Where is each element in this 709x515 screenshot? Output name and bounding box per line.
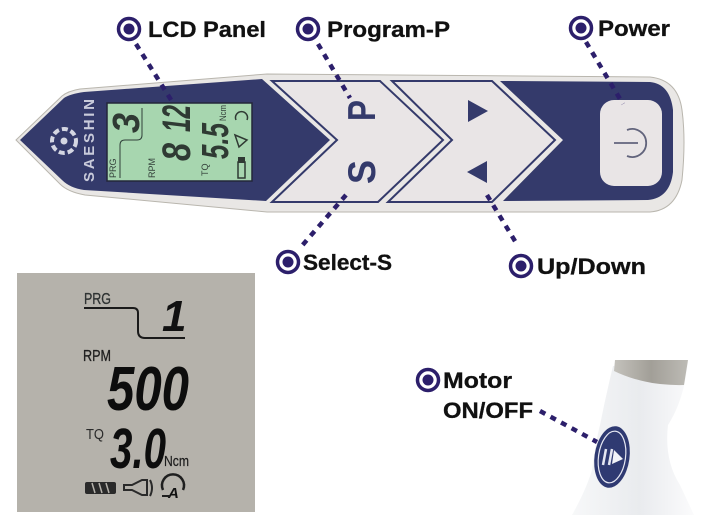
LCD screen	[106, 103, 252, 181]
label: LCD Panel: LCD Panel	[148, 17, 266, 42]
torque value: 5.5	[195, 122, 237, 159]
letter P: P	[341, 100, 384, 121]
label: Program-P: Program-P	[327, 17, 450, 42]
device body	[16, 74, 684, 212]
LCD screen: RPM	[147, 158, 157, 178]
program row	[84, 291, 186, 341]
torque row: TQ	[86, 426, 104, 443]
left navy section	[20, 79, 330, 201]
brand name: SAESHIN	[81, 99, 98, 182]
LCD screen: PRG	[108, 158, 118, 178]
leader: Select-S	[300, 195, 346, 248]
program number: 3	[106, 113, 148, 133]
icon: power	[614, 129, 646, 157]
status icons	[85, 474, 184, 502]
label: Power	[570, 16, 670, 41]
leader: Power	[586, 42, 623, 104]
label: Power: Power	[598, 16, 670, 41]
power button	[600, 100, 662, 186]
brand logo	[52, 99, 98, 182]
up/down chevron button	[388, 81, 555, 202]
torque row: Ncm	[164, 453, 189, 470]
status icons	[235, 112, 248, 178]
S and P chevron button	[272, 81, 443, 202]
rpm row	[83, 348, 189, 424]
LCD screen: TQ	[200, 164, 210, 176]
leader: LCD Panel	[136, 44, 173, 103]
handpiece illustration	[572, 360, 694, 515]
rpm value: 12	[155, 105, 199, 132]
handpiece collar	[614, 360, 688, 385]
leader: Up/Down	[487, 195, 518, 246]
motor button	[590, 424, 634, 490]
LCD screen: Ncm	[218, 105, 228, 121]
leader: Motor ON/OFF	[540, 411, 597, 442]
letter S: S	[341, 160, 384, 184]
icon: speaker	[124, 480, 152, 496]
icon: auto reverse: A	[167, 485, 179, 502]
label: Up/Down: Up/Down	[537, 254, 646, 279]
panel: control pad device	[16, 74, 684, 212]
icon: battery	[85, 482, 116, 494]
icon: play pause	[603, 449, 623, 465]
panel: enlarged LCD	[17, 273, 255, 512]
rpm row: 500	[107, 355, 189, 424]
torque row: 3.0	[110, 417, 166, 481]
leader: Program-P	[318, 44, 350, 98]
program row: 1	[162, 292, 186, 341]
icon: down triangle	[467, 161, 487, 183]
label: Motor ON/OFF	[418, 368, 533, 423]
program row: PRG	[84, 291, 111, 308]
right navy section	[500, 81, 673, 201]
icon: up triangle	[468, 100, 488, 122]
label: Motor ON/OFF: ON/OFF	[443, 398, 533, 423]
rpm value: 8	[155, 142, 199, 161]
label: Select-S: Select-S	[303, 250, 392, 275]
label: Motor ON/OFF: Motor	[443, 368, 512, 393]
rpm row: RPM	[83, 348, 111, 365]
rpm value	[155, 105, 199, 161]
